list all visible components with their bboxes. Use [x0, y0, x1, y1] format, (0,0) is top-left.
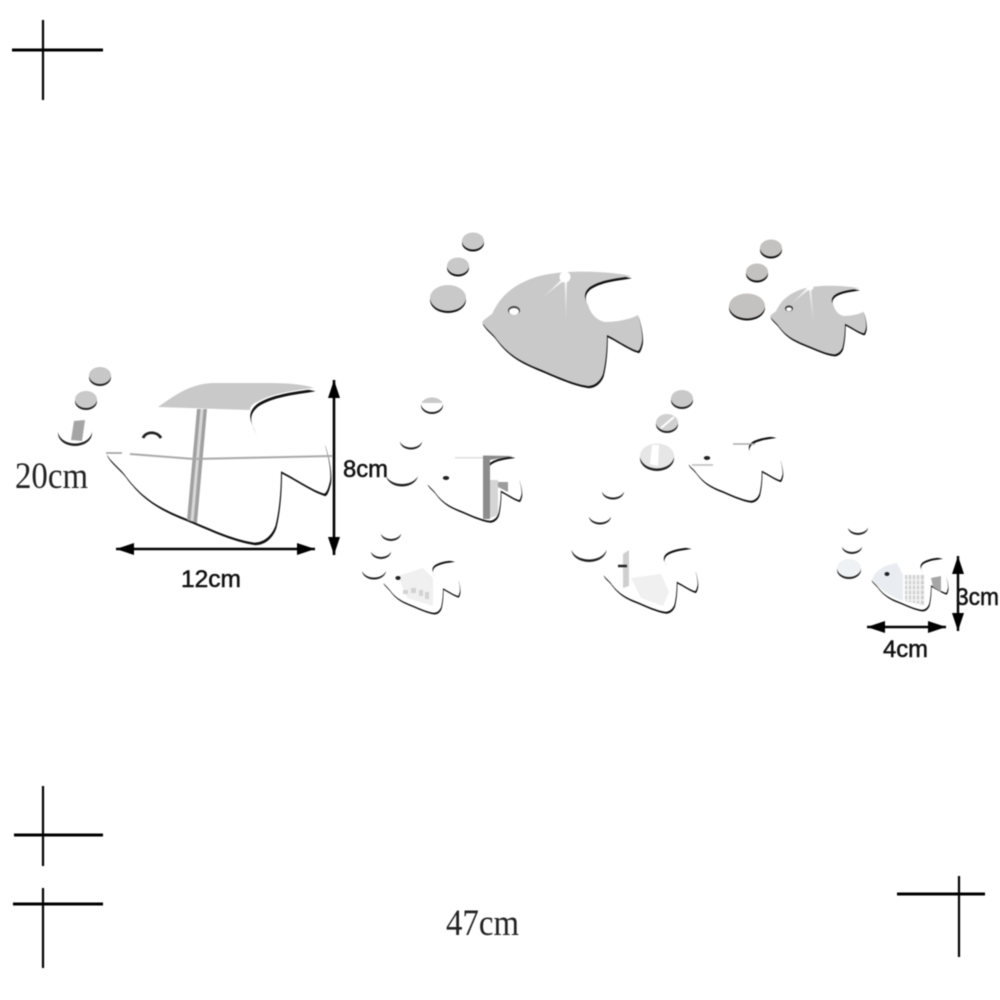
- bubbles: middle right fish: [640, 390, 693, 471]
- fish body: large: [106, 382, 332, 545]
- fish body: lower middle: [603, 544, 698, 614]
- label: 4cm: 4cm: [883, 636, 928, 663]
- label: 3cm: 3cm: [956, 584, 999, 611]
- sparkle: top right fish: [789, 284, 814, 328]
- bubbles: top right fish: [729, 240, 782, 320]
- bubbles: lower left fish: [362, 524, 402, 580]
- fish body: middle right: [688, 433, 783, 503]
- crop mark: top left: [12, 20, 103, 100]
- arrow: 8cm height: [333, 380, 335, 555]
- fish body: top centre: [482, 272, 643, 388]
- fish group: lower left mirror fish: [362, 524, 461, 615]
- label: 47cm total width: 47cm: [446, 903, 519, 944]
- fish body: top right: [770, 286, 867, 356]
- arrow: 12cm width: [116, 548, 315, 550]
- fish group: lower middle mirror fish: [571, 482, 698, 614]
- crop mark: lower left upper: [14, 786, 103, 866]
- bubbles: top centre fish: [430, 232, 484, 313]
- fish group: top right grey fish: [729, 240, 867, 356]
- label: 12cm: 12cm: [181, 566, 241, 593]
- fish body: middle left: [427, 453, 522, 523]
- arrow: 4cm width: [867, 626, 946, 628]
- bubbles: middle left fish: [385, 395, 443, 486]
- label: 8cm: 8cm: [343, 456, 388, 483]
- bubbles: large fish: [58, 367, 111, 446]
- sparkle: top centre fish: [540, 272, 570, 326]
- fish group: bottom right mirror fish: [837, 518, 949, 612]
- fish body: bottom right: [871, 555, 949, 612]
- crop mark: lower left lower: [13, 888, 103, 968]
- fish group: middle right mirror fish: [640, 390, 783, 503]
- bubbles: lower middle fish: [571, 482, 624, 562]
- fish group: large fish with dimensions: [58, 367, 332, 545]
- fish group: middle left mirror fish: [385, 395, 522, 523]
- fish group: top centre grey fish: [430, 232, 643, 388]
- arrow: 3cm height: [957, 556, 959, 631]
- label: 20cm total height: 20cm: [15, 456, 88, 497]
- bubbles: bottom right fish: [837, 518, 868, 579]
- fish body: lower left: [383, 558, 461, 615]
- crop mark: lower right: [897, 876, 985, 957]
